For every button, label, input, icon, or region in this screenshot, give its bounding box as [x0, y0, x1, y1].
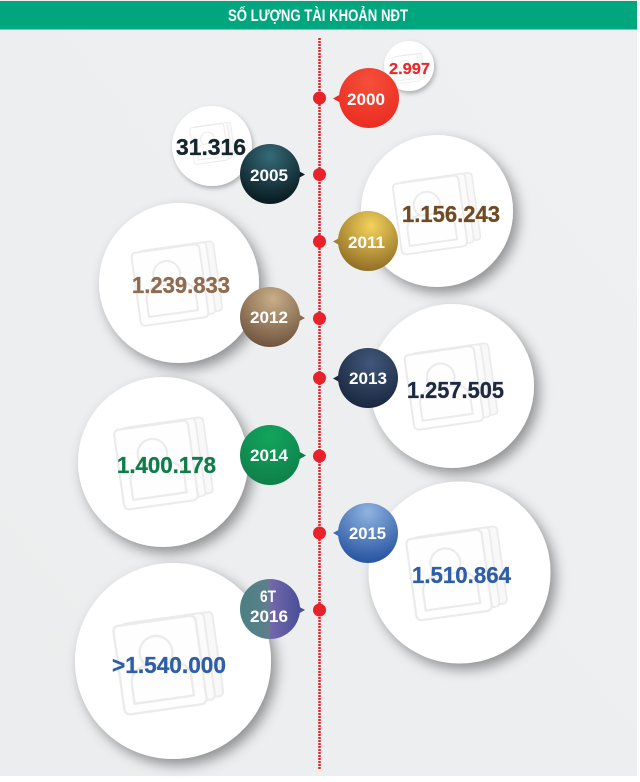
year badge 6T 2016: 2016: [250, 607, 288, 626]
year badge 2013: 2013: [349, 369, 387, 388]
value bubble >1.540.000: >1.540.000: [112, 652, 226, 678]
value bubble 1.257.505: [370, 304, 534, 468]
year badge 2005: 2005: [250, 166, 288, 185]
value bubble 1.239.833: [99, 203, 259, 363]
year badge 2014: [240, 425, 306, 485]
year badge 2012: [240, 287, 305, 347]
year badge 2011: 2011: [348, 233, 385, 252]
value bubble >1.540.000: [75, 563, 271, 759]
title bar: [0, 1, 637, 30]
value bubble 1.239.833: 1.239.833: [132, 272, 230, 298]
year badge 6T 2016: 6T: [260, 587, 276, 606]
year badge 6T 2016: [240, 579, 305, 639]
year badge 2012: 2012: [250, 308, 288, 327]
entry: 2000: [333, 41, 434, 128]
value bubble 1.257.505: 1.257.505: [407, 377, 504, 403]
entry: 2015: [333, 482, 550, 664]
title bar: SỐ LƯỢNG TÀI KHOẢN NĐT: [228, 5, 408, 25]
year badge 2011: [333, 211, 398, 271]
value bubble 1.156.243: 1.156.243: [402, 201, 500, 227]
timeline axis: [313, 38, 326, 770]
entry: 2013: [333, 304, 534, 468]
entry: 2005: [172, 106, 305, 204]
value bubble 1.510.864: [368, 482, 550, 664]
value bubble 2.997: 2.997: [389, 61, 430, 78]
year badge 2000: 2000: [347, 90, 385, 109]
value bubble 1.156.243: [361, 135, 513, 287]
entry: 2014: [78, 377, 306, 547]
value bubble 1.510.864: 1.510.864: [412, 562, 511, 588]
entry: 2011: [333, 135, 513, 287]
year badge 2013: [333, 348, 398, 408]
value bubble 1.400.178: 1.400.178: [117, 452, 216, 478]
value bubble 1.400.178: [78, 377, 248, 547]
year badge 2015: [333, 503, 398, 563]
entry: 6T 2016: [75, 563, 305, 759]
value bubble 31.316: 31.316: [176, 134, 246, 160]
year badge 2015: 2015: [349, 524, 386, 543]
year badge 2014: 2014: [250, 446, 289, 465]
entry: 2012: [99, 203, 305, 363]
